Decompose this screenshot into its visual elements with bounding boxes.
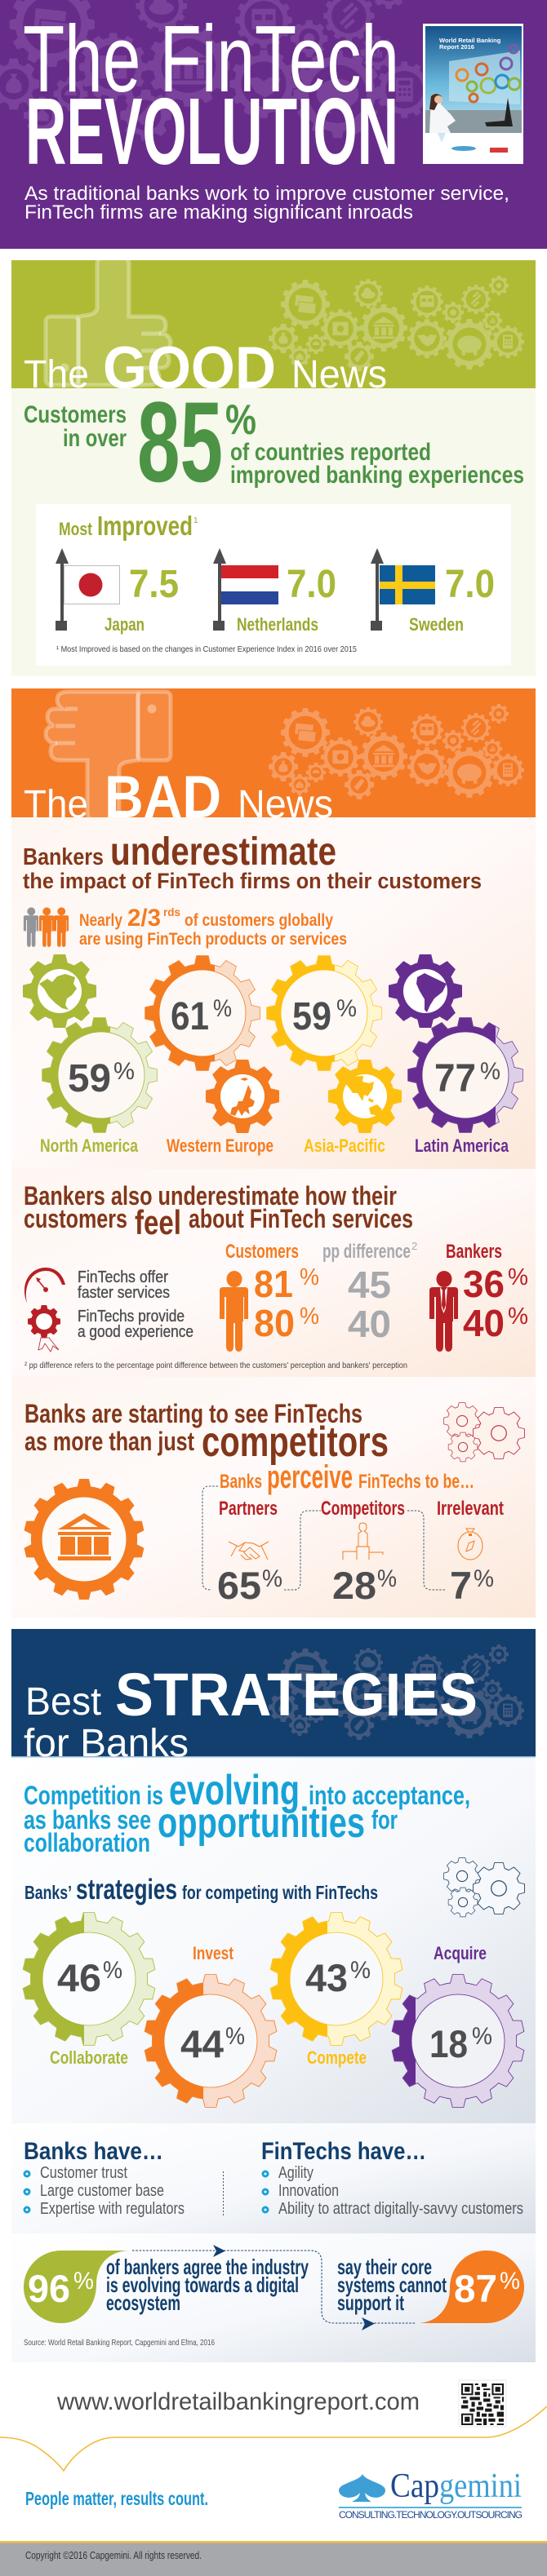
list: banks have: Customer trust: [40, 2164, 127, 2182]
subtitle: As traditional banks work to improve customer service,: [24, 183, 509, 205]
labels: fintech statements: FinTechs provide: [78, 1308, 185, 1326]
table: customers: %: [300, 1303, 319, 1330]
panel: bad news: [11, 688, 536, 1618]
heading: most improved: Most: [59, 519, 93, 539]
heading: competition is evolving: collaboration: [24, 1828, 150, 1857]
banner: bad news: The: [24, 783, 88, 826]
banner: bad news: News: [238, 783, 333, 826]
icon: three people: [24, 907, 69, 947]
stat: 85 percent: in over: [63, 425, 127, 452]
stat: competitors: Competitors: [321, 1498, 405, 1520]
heading: banks perceive: Banks: [220, 1471, 262, 1493]
chart: acquire gear: Acquire: [434, 1943, 487, 1963]
labels: fintech statements: faster services: [78, 1284, 170, 1302]
chart: north america gear: 59: [68, 1057, 111, 1100]
heading: most improved: Improved: [97, 511, 193, 541]
footnote: pp difference: ² pp difference refers to the percentage point difference between the customers' perception and bankers' perception: [24, 1361, 407, 1370]
table: bankers: 40: [463, 1302, 505, 1344]
heading: competition is evolving: into acceptance,: [309, 1781, 470, 1810]
tagline: People matter, results count.: [25, 2488, 208, 2509]
website url: www.worldretailbankingreport.com: [56, 2388, 420, 2415]
icon: thumbs down: [46, 692, 171, 823]
heading: bankers underestimate: Bankers: [23, 844, 104, 870]
banner: bad news: [11, 688, 536, 830]
chart: compete gear: Compete: [307, 2047, 367, 2068]
icon: south america map gear: [389, 954, 462, 1028]
heading: bankers also underestimate: Bankers also underestimate how their: [24, 1181, 397, 1211]
heading: most improved: 1: [193, 516, 198, 525]
stat: competitors: [321, 1498, 405, 1607]
stat: 96 percent: %: [73, 2268, 94, 2295]
chart: asia-pacific gear: %: [336, 995, 357, 1022]
flag: Japan: [56, 548, 179, 635]
stat: 87 percent: support it: [337, 2291, 404, 2315]
heading: competition is evolving: as banks see: [24, 1805, 151, 1835]
report cover: [423, 24, 523, 164]
table: customers: %: [300, 1264, 319, 1290]
stat: 85 percent: of countries reported: [230, 439, 431, 466]
flag: Netherlands: Netherlands: [237, 614, 318, 635]
heading: bankers also underestimate: [24, 1181, 413, 1242]
chart: invest gear: [145, 1943, 277, 2107]
chart: western europe gear: %: [213, 995, 232, 1022]
heading: more than competitors: Banks are starting to see FinTechs: [24, 1399, 362, 1428]
icon: bank gear: [24, 1479, 145, 1600]
table: bankers: %: [508, 1303, 528, 1330]
chart: acquire gear: %: [472, 2023, 492, 2050]
source: Source: World Retail Banking Report, Capgemini and Efma, 2016: [24, 2338, 215, 2348]
icon: north america map gear: [23, 954, 96, 1028]
labels: fintech statements: a good experience: [78, 1323, 193, 1341]
chart: north america gear: %: [113, 1058, 135, 1085]
heading: banks strategies: strategies: [76, 1874, 177, 1905]
icon: europe map gear: [206, 1060, 279, 1133]
stat: 85 percent: %: [225, 396, 256, 444]
stat: 87 percent: 87: [454, 2267, 497, 2310]
logo: capgemini: gemini: [439, 2468, 522, 2505]
heading: banks perceive: [220, 1459, 474, 1495]
text: nearly two thirds: Nearly: [79, 911, 122, 930]
table: customers: 80: [254, 1302, 295, 1344]
flag: Netherlands: 7.0: [287, 563, 336, 606]
heading: competition is evolving: [24, 1767, 470, 1857]
logo: capgemini: CONSULTING.TECHNOLOGY.OUTSOURCING: [339, 2509, 523, 2521]
chart: latin america gear: [408, 1018, 523, 1132]
icon: outline gears red: [444, 1403, 524, 1462]
panel: best strategies: [11, 1629, 536, 2362]
heading: banks perceive: perceive: [267, 1459, 353, 1495]
heading: bankers also underestimate: feel: [135, 1203, 181, 1242]
stat: partners: %: [262, 1565, 282, 1592]
heading: competition is evolving: for: [371, 1805, 398, 1835]
subtitle: FinTech firms are making significant inroads: [24, 201, 413, 224]
heading: more than competitors: competitors: [202, 1419, 389, 1466]
text: nearly two thirds: [79, 905, 347, 949]
table: pp difference: [322, 1240, 417, 1345]
heading: banks strategies: for competing with FinTechs: [182, 1882, 378, 1903]
stat: 96 percent: [24, 2251, 309, 2323]
banner: best strategies: [11, 1629, 536, 1765]
chart: collaborate gear: Collaborate: [50, 2047, 128, 2068]
heading: banks strategies: [24, 1874, 378, 1905]
stat: irrelevant: %: [474, 1565, 494, 1592]
heading: competition is evolving: Competition is: [24, 1781, 163, 1810]
yellow swoosh line: [0, 2406, 547, 2471]
stat: irrelevant: [437, 1498, 504, 1607]
subtitle: [24, 183, 509, 224]
table: pp difference: 2: [411, 1240, 417, 1252]
heading: banks strategies: Banks’: [24, 1882, 72, 1903]
footer bar: Copyright ©2016 Capgemini. All rights reserved.: [25, 2549, 202, 2561]
text: nearly two thirds: are using FinTech products or services: [79, 930, 347, 949]
report cover: World Retail Banking: [439, 37, 501, 44]
icon: asia map gear: [328, 1060, 402, 1133]
list: banks have: Banks have…: [24, 2138, 163, 2165]
footnote: most improved: ¹ Most Improved is based on the changes in Customer Experience Index in 2016 over 2015: [56, 644, 357, 654]
stat: irrelevant: 7: [450, 1564, 472, 1607]
logo: capgemini: Cap: [390, 2468, 439, 2505]
labels: regions: Asia-Pacific: [304, 1135, 385, 1156]
flag: Sweden: Sweden: [409, 614, 464, 635]
labels: regions: [40, 1135, 509, 1156]
list: fintechs have: Agility: [278, 2164, 314, 2182]
logo: capgemini: [339, 2468, 523, 2521]
labels: regions: Western Europe: [167, 1135, 274, 1156]
list: banks have: Large customer base: [40, 2182, 164, 2200]
table: customers: [220, 1241, 319, 1352]
chart: invest gear: %: [225, 2023, 245, 2050]
stat: 96 percent: is evolving towards a digital: [106, 2273, 299, 2297]
stat: 85 percent: [24, 378, 524, 506]
table: bankers: %: [508, 1264, 528, 1290]
footer bar: [0, 2541, 547, 2576]
text: nearly two thirds: of customers globally: [185, 911, 333, 930]
chart: invest gear: Invest: [193, 1943, 234, 1963]
stat: 96 percent: 96: [28, 2267, 70, 2310]
stat: irrelevant: Irrelevant: [437, 1498, 504, 1520]
heading: more than competitors: as more than just: [24, 1427, 194, 1456]
chart: asia-pacific gear: 59: [292, 995, 331, 1038]
banner: good news: News: [291, 353, 387, 396]
stat: partners: [217, 1498, 282, 1607]
chart: collaborate gear: [23, 1913, 155, 2068]
banner: best strategies: for Banks: [24, 1722, 189, 1765]
chart: western europe gear: [145, 956, 260, 1070]
flag: Netherlands: [213, 548, 336, 635]
heading: most improved: [59, 511, 198, 541]
table: bankers: Bankers: [446, 1241, 502, 1263]
panel: good news: [11, 254, 536, 676]
banner: bad news: BAD: [105, 764, 221, 830]
icon: thumbs up: [46, 254, 171, 385]
labels: regions: North America: [40, 1135, 139, 1156]
chart: collaborate gear: %: [103, 1957, 122, 1984]
chart: north america gear: [42, 1018, 157, 1132]
stat: 87 percent: systems cannot: [337, 2273, 447, 2297]
list: fintechs have: [261, 2138, 523, 2218]
table: pp difference: 45: [348, 1264, 391, 1306]
panel: most improved: [36, 504, 511, 666]
heading: bankers underestimate: underestimate: [110, 830, 336, 874]
chart: acquire gear: 18: [429, 2022, 468, 2065]
flag: Japan: Japan: [105, 614, 145, 635]
heading: bankers also underestimate: about FinTech services: [189, 1204, 413, 1233]
panel: header: [0, 0, 547, 249]
stat: 96 percent: of bankers agree the industry: [106, 2255, 309, 2279]
stat: 87 percent: say their core: [337, 2255, 432, 2279]
banner: good news: The: [24, 353, 89, 396]
connector: dotted arrows: [132, 2245, 416, 2330]
heading: bankers underestimate: [23, 830, 482, 893]
stat: 87 percent: [337, 2251, 524, 2323]
icon: outline gears navy: [444, 1858, 524, 1917]
chart: latin america gear: 77: [434, 1057, 476, 1100]
stat: partners: 65: [217, 1564, 261, 1607]
flag: Japan: 7.5: [129, 563, 179, 606]
flag: Sweden: [371, 548, 495, 635]
qr code: [459, 2380, 506, 2427]
table: pp difference: 40: [348, 1303, 391, 1345]
chart: compete gear: %: [350, 1957, 371, 1984]
connector: dotted path: [202, 1486, 445, 1590]
stat: 85 percent: 85: [137, 378, 223, 506]
chart: collaborate gear: 46: [57, 1956, 101, 1999]
stat: 87 percent: %: [500, 2268, 520, 2295]
table: customers: Customers: [225, 1241, 299, 1263]
stat: competitors: %: [377, 1565, 397, 1592]
banner: best strategies: Best: [25, 1680, 101, 1724]
table: bankers: [429, 1241, 528, 1352]
chart: invest gear: 44: [180, 2022, 224, 2065]
flag: Sweden: 7.0: [445, 563, 495, 606]
table: customers: 81: [254, 1263, 293, 1305]
heading: competition is evolving: evolving: [169, 1767, 300, 1814]
chart: western europe gear: 61: [171, 995, 209, 1038]
title: The FinTech: The FinTech: [23, 6, 399, 112]
heading: banks perceive: FinTechs to be…: [358, 1471, 474, 1493]
icon: speedometer: [24, 1268, 65, 1303]
heading: more than competitors: [24, 1399, 389, 1466]
list: fintechs have: Innovation: [278, 2182, 339, 2200]
stat: competitors: 28: [332, 1564, 376, 1607]
heading: competition is evolving: opportunities: [158, 1799, 365, 1847]
stat: 85 percent: Customers: [24, 401, 127, 428]
text: nearly two thirds: 2/3: [127, 905, 161, 932]
stat: partners: Partners: [219, 1498, 278, 1520]
labels: fintech statements: FinTechs offer: [78, 1268, 168, 1286]
banner: good news: [11, 260, 536, 388]
chart: latin america gear: %: [480, 1058, 500, 1085]
chart: asia-pacific gear: [267, 956, 381, 1070]
labels: fintech statements: [78, 1268, 193, 1341]
chart: compete gear: [270, 1913, 402, 2068]
banner: best strategies: STRATEGIES: [115, 1661, 478, 1728]
table: bankers: 36: [463, 1263, 505, 1305]
text: nearly two thirds: rds: [163, 905, 180, 918]
chart: acquire gear: [392, 1943, 524, 2107]
list: banks have: [24, 2138, 185, 2218]
table: pp difference: pp difference: [322, 1241, 411, 1263]
icon: award gear: [28, 1305, 60, 1352]
list: banks have: Expertise with regulators: [40, 2200, 185, 2218]
banner: good news: GOOD: [103, 335, 276, 401]
chart: compete gear: 43: [305, 1956, 348, 1999]
report cover: Report 2016: [439, 43, 474, 51]
labels: regions: Latin America: [415, 1135, 509, 1156]
heading: bankers underestimate: the impact of FinTech firms on their customers: [23, 869, 482, 893]
list: fintechs have: FinTechs have…: [261, 2138, 426, 2165]
heading: bankers also underestimate: customers: [24, 1204, 127, 1233]
stat: 96 percent: ecosystem: [106, 2291, 180, 2315]
